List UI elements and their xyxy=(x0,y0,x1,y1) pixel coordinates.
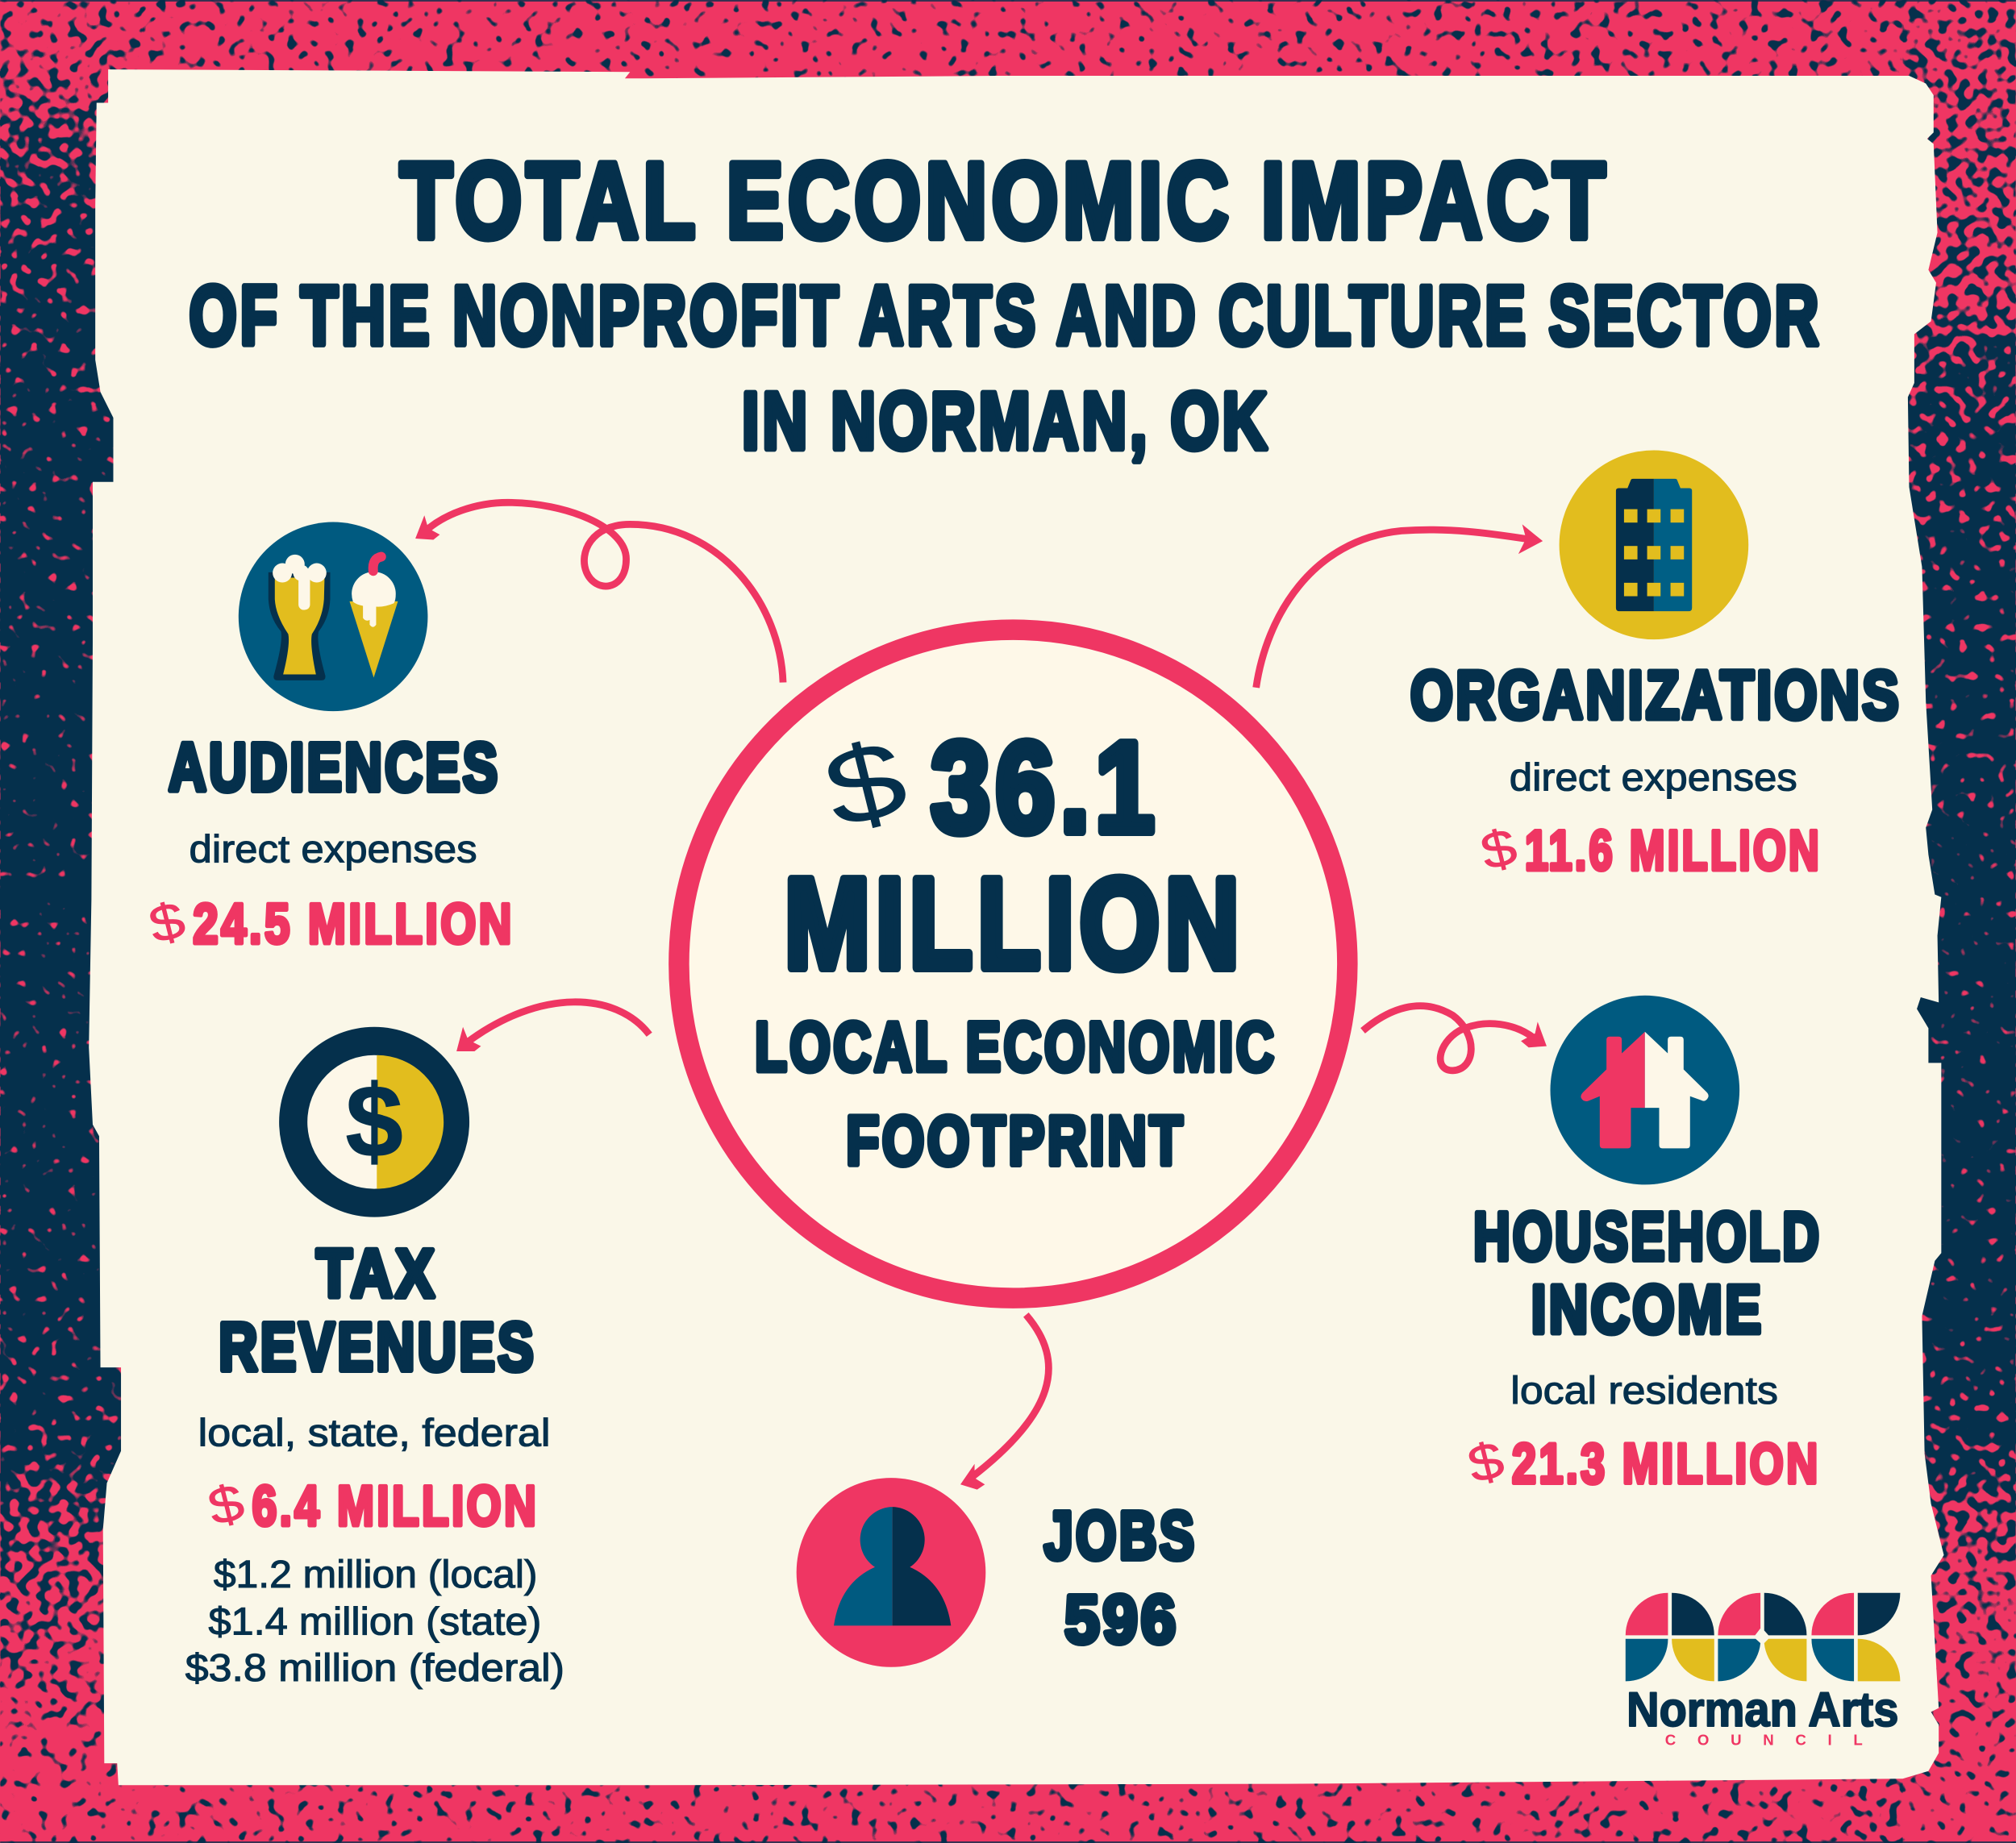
arrow: to organizations xyxy=(1256,524,1543,688)
panel: audiences xyxy=(144,522,514,955)
icon: dollar coin xyxy=(294,1041,456,1203)
panel: jobs xyxy=(797,1478,1197,1667)
icon: house xyxy=(1551,996,1739,1184)
arrow: to tax revenues xyxy=(456,1002,649,1051)
arrow: to jobs xyxy=(960,1315,1048,1490)
arrow: to household income xyxy=(1363,1006,1547,1071)
amount xyxy=(202,1472,539,1537)
description: direct expenses xyxy=(190,829,477,872)
heading line 2: REVENUES xyxy=(219,1308,536,1384)
panel: central footprint circle xyxy=(679,630,1347,1298)
heading line 1: TAX xyxy=(316,1235,437,1311)
amount: 11.6 MILLION xyxy=(1525,819,1822,882)
icon: person xyxy=(797,1478,985,1667)
icon: building xyxy=(1560,451,1748,639)
breakdown xyxy=(185,1554,564,1690)
amount: 24.5 MILLION xyxy=(193,892,514,955)
breakdown: $3.8 million (federal) xyxy=(185,1647,564,1690)
logo mark xyxy=(1626,1593,1900,1681)
amount: 6.4 MILLION xyxy=(252,1475,539,1537)
amount: $ xyxy=(1462,1429,1510,1494)
footprint: FOOTPRINT xyxy=(846,1102,1185,1179)
amount: 21.3 MILLION xyxy=(1512,1433,1820,1496)
logo subtitle: COUNCIL xyxy=(1665,1732,1863,1749)
icon: dollar coin: $ xyxy=(346,1065,403,1179)
logo name: Norman Arts xyxy=(1627,1682,1898,1737)
amount xyxy=(1475,817,1822,882)
local economic: LOCAL ECONOMIC xyxy=(755,1009,1277,1086)
description: local residents xyxy=(1510,1370,1778,1412)
amount xyxy=(144,890,514,955)
heading line 1: HOUSEHOLD xyxy=(1473,1198,1822,1274)
dollar sign large: $ xyxy=(813,715,918,851)
title block xyxy=(190,141,1822,466)
heading: AUDIENCES xyxy=(169,729,500,805)
icon: beer and ice cream xyxy=(239,522,427,711)
million: MILLION xyxy=(785,851,1244,995)
heading: ORGANIZATIONS xyxy=(1410,657,1901,733)
title line 1: TOTAL ECONOMIC IMPACT xyxy=(400,141,1610,261)
amount: $ xyxy=(202,1472,249,1537)
panel: household income xyxy=(1462,996,1822,1496)
amount: $ xyxy=(144,890,190,955)
title line 3: IN NORMAN, OK xyxy=(742,376,1270,466)
panel: organizations xyxy=(1410,451,1901,882)
value: 596 xyxy=(1064,1581,1179,1657)
label: JOBS xyxy=(1044,1498,1197,1574)
description: local, state, federal xyxy=(198,1412,550,1454)
amount: 36.1 xyxy=(931,715,1160,859)
breakdown: $1.4 million (state) xyxy=(208,1601,541,1644)
amount: $ xyxy=(1475,817,1522,881)
panel: tax revenues xyxy=(185,1041,564,1690)
ring xyxy=(679,630,1347,1298)
arrow: to audiences xyxy=(415,502,783,682)
description: direct expenses xyxy=(1510,756,1797,799)
breakdown: $1.2 million (local) xyxy=(214,1554,538,1596)
amount xyxy=(1462,1429,1820,1496)
heading line 2: INCOME xyxy=(1531,1271,1764,1347)
logo: Norman Arts Council xyxy=(1626,1593,1900,1749)
